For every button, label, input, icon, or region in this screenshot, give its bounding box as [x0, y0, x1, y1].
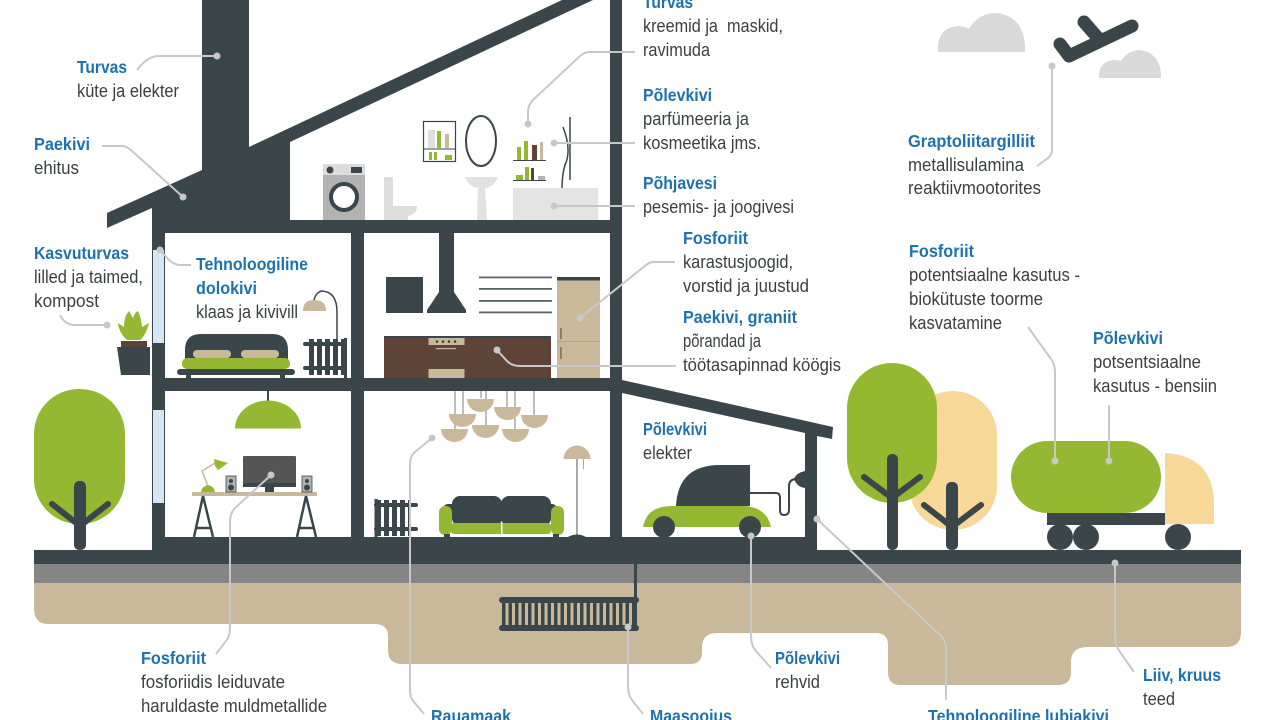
shower — [562, 117, 570, 188]
text: Turvas heating: küte ja elekter — [77, 81, 179, 101]
icon: potted plant — [117, 311, 150, 375]
text: Tehnoloogiline dolokivi — [196, 254, 308, 322]
desk — [192, 492, 317, 537]
icon: electric car — [643, 465, 805, 538]
text: Graptoliitargilliit: metallisulamina — [908, 155, 1025, 175]
text: Fosforiit biofuel: potentsiaalne kasutus - — [909, 265, 1080, 285]
text: Fosforiit food: vorstid ja juustud — [683, 276, 809, 296]
counter with oven — [384, 336, 551, 378]
cabinet — [423, 122, 456, 162]
icon: tree left — [34, 389, 125, 550]
icon: kitchen — [384, 233, 600, 378]
text: Tehnoloogiline dolokivi: dolokivi — [196, 278, 257, 298]
text: Fosforiit biofuel: kasvatamine — [909, 313, 1002, 333]
text: Graptoliitargilliit: reaktiivmootorites — [908, 178, 1041, 198]
panel: house structure — [107, 0, 833, 550]
washing machine — [323, 164, 365, 220]
mirror — [466, 116, 496, 166]
sofa — [439, 496, 564, 537]
text: Paekivi, graniit — [683, 307, 841, 375]
text: Põlevkivi electricity — [643, 419, 707, 463]
text: Fosforiit biofuel: Fosforiit — [909, 241, 974, 261]
text: Tehnoloogiline dolokivi: klaas ja kivivill — [196, 302, 298, 322]
text: Põlevkivi petrol: Põlevkivi — [1093, 328, 1163, 348]
text: Liiv, kruus: Liiv, kruus — [1143, 665, 1221, 685]
text: Tehnoloogiline dolokivi: Tehnoloogiline — [196, 254, 308, 274]
shelves with cosmetics — [513, 141, 546, 181]
text: Graptoliitargilliit — [908, 131, 1041, 198]
icon: tanker truck — [1011, 441, 1214, 550]
text: Fosforiit biofuel: biokütuste toorme — [909, 289, 1043, 309]
text: Paekivi, graniit: põrandad ja — [683, 331, 762, 351]
extractor hood — [427, 233, 466, 313]
text: Fosforiit rare earths: haruldaste muldmetallide — [141, 696, 327, 716]
desk lamp — [201, 459, 228, 492]
radiator — [376, 499, 416, 537]
icon: tree pair — [847, 363, 997, 550]
text: Põlevkivi perfume — [643, 85, 761, 153]
icon: living room — [376, 391, 590, 537]
text: Fosforiit rare earths: fosforiidis leiduvate — [141, 672, 285, 692]
text: Kasvuturvas: Kasvuturvas — [34, 243, 129, 263]
bed — [177, 334, 295, 378]
text: Põhjavesi: pesemis- ja joogivesi — [643, 197, 794, 217]
text: Fosforiit biofuel — [909, 241, 1080, 333]
chimney and upper roof — [107, 0, 622, 550]
icon: bedroom — [177, 291, 346, 378]
text: Põlevkivi tyres — [775, 648, 840, 692]
text: Fosforiit rare earths: Fosforiit — [141, 648, 206, 668]
wall cabinet — [386, 277, 423, 313]
text: Põlevkivi tyres: rehvid — [775, 672, 820, 692]
text: Fosforiit food: Fosforiit — [683, 228, 748, 248]
text: Turvas heating — [77, 57, 179, 101]
icon: airplane — [1060, 22, 1132, 63]
text: Põlevkivi electricity: Põlevkivi — [643, 419, 707, 439]
text: Põlevkivi perfume: kosmeetika jms. — [643, 133, 761, 153]
road surface — [34, 550, 1241, 564]
windows — [153, 250, 164, 503]
text: Fosforiit food — [683, 228, 809, 296]
rooms cut out — [165, 233, 610, 537]
fridge — [557, 277, 600, 378]
sink — [465, 177, 498, 220]
text: Paekivi construction: ehitus — [34, 158, 79, 178]
text: Turvas creams: kreemid ja maskid, — [643, 16, 783, 36]
text: Kasvuturvas: lilled ja taimed, — [34, 267, 143, 287]
panel: ground layers — [34, 550, 1241, 685]
garage — [622, 380, 833, 550]
text: Põlevkivi tyres: Põlevkivi — [775, 648, 840, 668]
text: Fosforiit food: karastusjoogid, — [683, 252, 793, 272]
icon: geothermal coil — [502, 564, 636, 631]
pendant lamps — [441, 391, 548, 442]
text: Liiv, kruus: teed — [1143, 689, 1175, 709]
text: Põhjavesi: Põhjavesi — [643, 173, 717, 193]
text: Põlevkivi petrol: potsentsiaalne — [1093, 352, 1201, 372]
toilet — [384, 177, 417, 220]
reading lamp — [303, 291, 337, 340]
icon: clouds — [938, 13, 1161, 78]
gravel layer — [34, 564, 1241, 583]
text: Paekivi, graniit: Paekivi, graniit — [683, 307, 797, 327]
monitor — [243, 456, 296, 492]
text: Põlevkivi petrol — [1093, 328, 1217, 396]
sand layer — [34, 583, 1241, 685]
text: Turvas heating: Turvas — [77, 57, 127, 77]
text: Turvas creams: ravimuda — [643, 40, 711, 60]
icon: office — [192, 391, 317, 537]
shelves — [479, 276, 552, 313]
text: Põhjavesi — [643, 173, 794, 217]
leader lines — [60, 52, 1134, 714]
text: Graptoliitargilliit: Graptoliitargilliit — [908, 131, 1035, 151]
text: Kasvuturvas: kompost — [34, 291, 99, 311]
text: Paekivi construction — [34, 134, 90, 178]
icon: bathroom furniture — [323, 116, 598, 220]
floor lamp — [564, 446, 590, 537]
text: Paekivi construction: Paekivi — [34, 134, 90, 154]
bathtub — [513, 188, 598, 220]
speakers — [226, 476, 312, 492]
text: Põlevkivi petrol: kasutus - bensiin — [1093, 376, 1217, 396]
text: Paekivi, graniit: töötasapinnad köögis — [683, 355, 841, 375]
radiator — [305, 338, 346, 378]
text: Põlevkivi perfume: Põlevkivi — [643, 85, 712, 105]
text: Liiv, kruus — [1143, 665, 1221, 709]
text: Turvas creams — [643, 0, 783, 60]
ceiling lamp — [235, 391, 301, 428]
text: Põlevkivi electricity: elekter — [643, 443, 692, 463]
text: Põlevkivi perfume: parfümeeria ja — [643, 109, 750, 129]
text: Fosforiit rare earths — [141, 648, 327, 716]
text: Kasvuturvas — [34, 243, 143, 311]
